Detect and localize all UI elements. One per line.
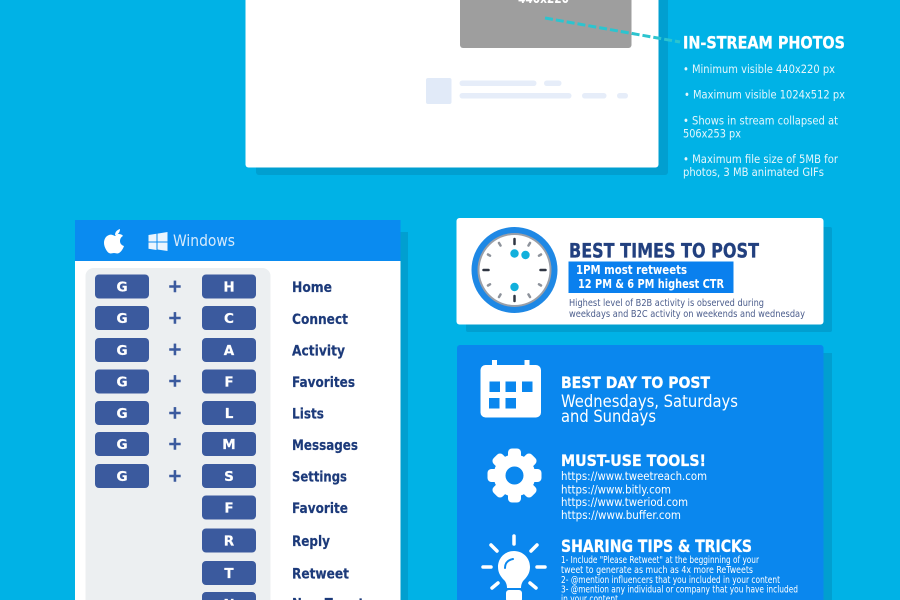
- shortcut row: favorites: G: [116, 374, 128, 390]
- body text: [569, 298, 805, 320]
- text block: best day to post: BEST DAY TO POST: [561, 373, 710, 392]
- icon: gear: [488, 448, 542, 502]
- shortcut row: settings: +: [168, 466, 182, 486]
- shortcut row: activity: +: [168, 340, 182, 360]
- text block: must-use tools: https://www.buffer.com: [561, 508, 681, 522]
- shortcut row: favorite: [202, 496, 348, 520]
- bullet list: 506x253 px: [683, 126, 741, 140]
- bullet list: [683, 62, 845, 179]
- shortcut row: retweet: Retweet: [292, 566, 349, 582]
- body text: weekdays and B2C activity on weekends and wednesday: [569, 309, 805, 320]
- highlight box: 1PM most retweets: [576, 263, 687, 277]
- shortcut row: lists: G: [116, 406, 128, 422]
- shortcut row: lists: Lists: [292, 406, 324, 422]
- callout arrow: dashed line: [545, 18, 680, 42]
- shortcut row: home: G: [116, 280, 128, 296]
- heading: in-stream photos: IN-STREAM PHOTOS: [683, 34, 845, 52]
- shortcut row: retweet: [202, 561, 349, 585]
- shortcut row: connect: G: [116, 311, 128, 327]
- bullet list: • Minimum visible 440x220 px: [683, 62, 835, 76]
- icon: light bulb: [483, 536, 545, 600]
- shortcut row: home: Home: [292, 280, 332, 296]
- panel: best day, tools, tips: [457, 345, 832, 600]
- shortcut row: messages: [95, 432, 358, 456]
- bullet list: • Maximum file size of 5MB for: [683, 152, 838, 166]
- icon: apple: [104, 229, 124, 253]
- shortcut row: lists: L: [225, 406, 234, 422]
- shortcut row: connect: [95, 306, 348, 330]
- icon: windows: [148, 232, 168, 251]
- shortcut row: favorites: +: [168, 372, 182, 392]
- heading: best times to post: BEST TIMES TO POST: [569, 240, 760, 262]
- shortcut row: reply: R: [224, 534, 235, 550]
- tweet footer placeholder: [426, 78, 628, 104]
- shortcut row: messages: +: [168, 434, 182, 454]
- text block: must-use tools: https://www.tweetreach.com: [561, 469, 707, 483]
- shortcut row: activity: G: [116, 343, 128, 359]
- shortcut row: home: H: [223, 280, 235, 296]
- text block: must-use tools: MUST-USE TOOLS!: [561, 451, 706, 470]
- windows label: Windows: [173, 231, 235, 250]
- shortcut row: connect: Connect: [292, 312, 348, 328]
- text block: best day to post: and Sundays: [561, 407, 656, 427]
- shortcut row: settings: G: [116, 469, 128, 485]
- panel: keyboard shortcuts: [75, 220, 408, 600]
- text block: must-use tools: https://www.bitly.com: [561, 482, 671, 496]
- bullet list: photos, 3 MB animated GIFs: [683, 165, 824, 179]
- bullet list: • Shows in stream collapsed at: [683, 114, 838, 128]
- shortcut row: favorite: F: [224, 500, 234, 516]
- shortcut row: settings: [95, 464, 347, 488]
- icon: calendar: [480, 360, 541, 418]
- text block: sharing tips and tricks: 2- @mention influencers that you included in your content: [561, 575, 780, 586]
- text block: sharing tips and tricks: SHARING TIPS & TRICKS: [561, 537, 752, 556]
- shortcut column background: [86, 268, 270, 600]
- text block: sharing tips and tricks: 3- @mention any individual or company that you have included: [561, 584, 798, 596]
- shortcut row: favorites: F: [224, 374, 234, 390]
- text block: best day to post: [561, 373, 738, 427]
- shortcut row: messages: G: [116, 437, 128, 453]
- image placeholder: [460, 0, 632, 48]
- body text: Highest level of B2B activity is observed during: [569, 298, 764, 309]
- text block: must-use tools: [561, 451, 707, 522]
- text block: best day to post: Wednesdays, Saturdays: [561, 392, 738, 412]
- shortcut row: retweet: T: [224, 566, 234, 582]
- shortcut row: activity: Activity: [292, 344, 345, 360]
- text block: sharing tips and tricks: 1- Include "Please Retweet" at the begginning of your: [561, 555, 760, 566]
- shortcut row: messages: M: [222, 437, 236, 453]
- icon: clock: [472, 227, 558, 313]
- text block: must-use tools: https://www.tweriod.com: [561, 495, 688, 509]
- shortcut row: reply: Reply: [292, 534, 330, 550]
- shortcut row: settings: S: [224, 469, 234, 485]
- shortcut row: home: [95, 274, 332, 298]
- shortcut row: activity: A: [224, 343, 235, 359]
- shortcut row: home: +: [168, 277, 182, 297]
- shortcut row: new tweet: [202, 592, 364, 600]
- panel: tweet mockup: [246, 0, 668, 175]
- shortcut row: messages: Messages: [292, 438, 358, 454]
- text block: sharing tips and tricks: tweet to generate as much as 4x more ReTweets: [561, 565, 753, 576]
- shortcut row: lists: +: [168, 404, 182, 424]
- shortcut row: favorites: Favorites: [292, 375, 355, 391]
- shortcut row: lists: [95, 401, 324, 425]
- text block: sharing tips and tricks: [561, 537, 798, 600]
- panel: best times to post: [456, 218, 832, 332]
- shortcut row: settings: Settings: [292, 470, 347, 486]
- shortcut row: favorites: [95, 370, 355, 394]
- highlight box: [568, 262, 734, 293]
- shortcut row: reply: [202, 528, 330, 552]
- text block: in-stream photos: [683, 34, 845, 179]
- shortcut row: connect: +: [168, 308, 182, 328]
- shortcut row: favorite: Favorite: [292, 501, 348, 517]
- shortcut row: connect: C: [224, 311, 234, 327]
- shortcut row: activity: [95, 338, 345, 362]
- bullet list: • Maximum visible 1024x512 px: [684, 88, 845, 102]
- highlight box: 12 PM & 6 PM highest CTR: [578, 277, 724, 291]
